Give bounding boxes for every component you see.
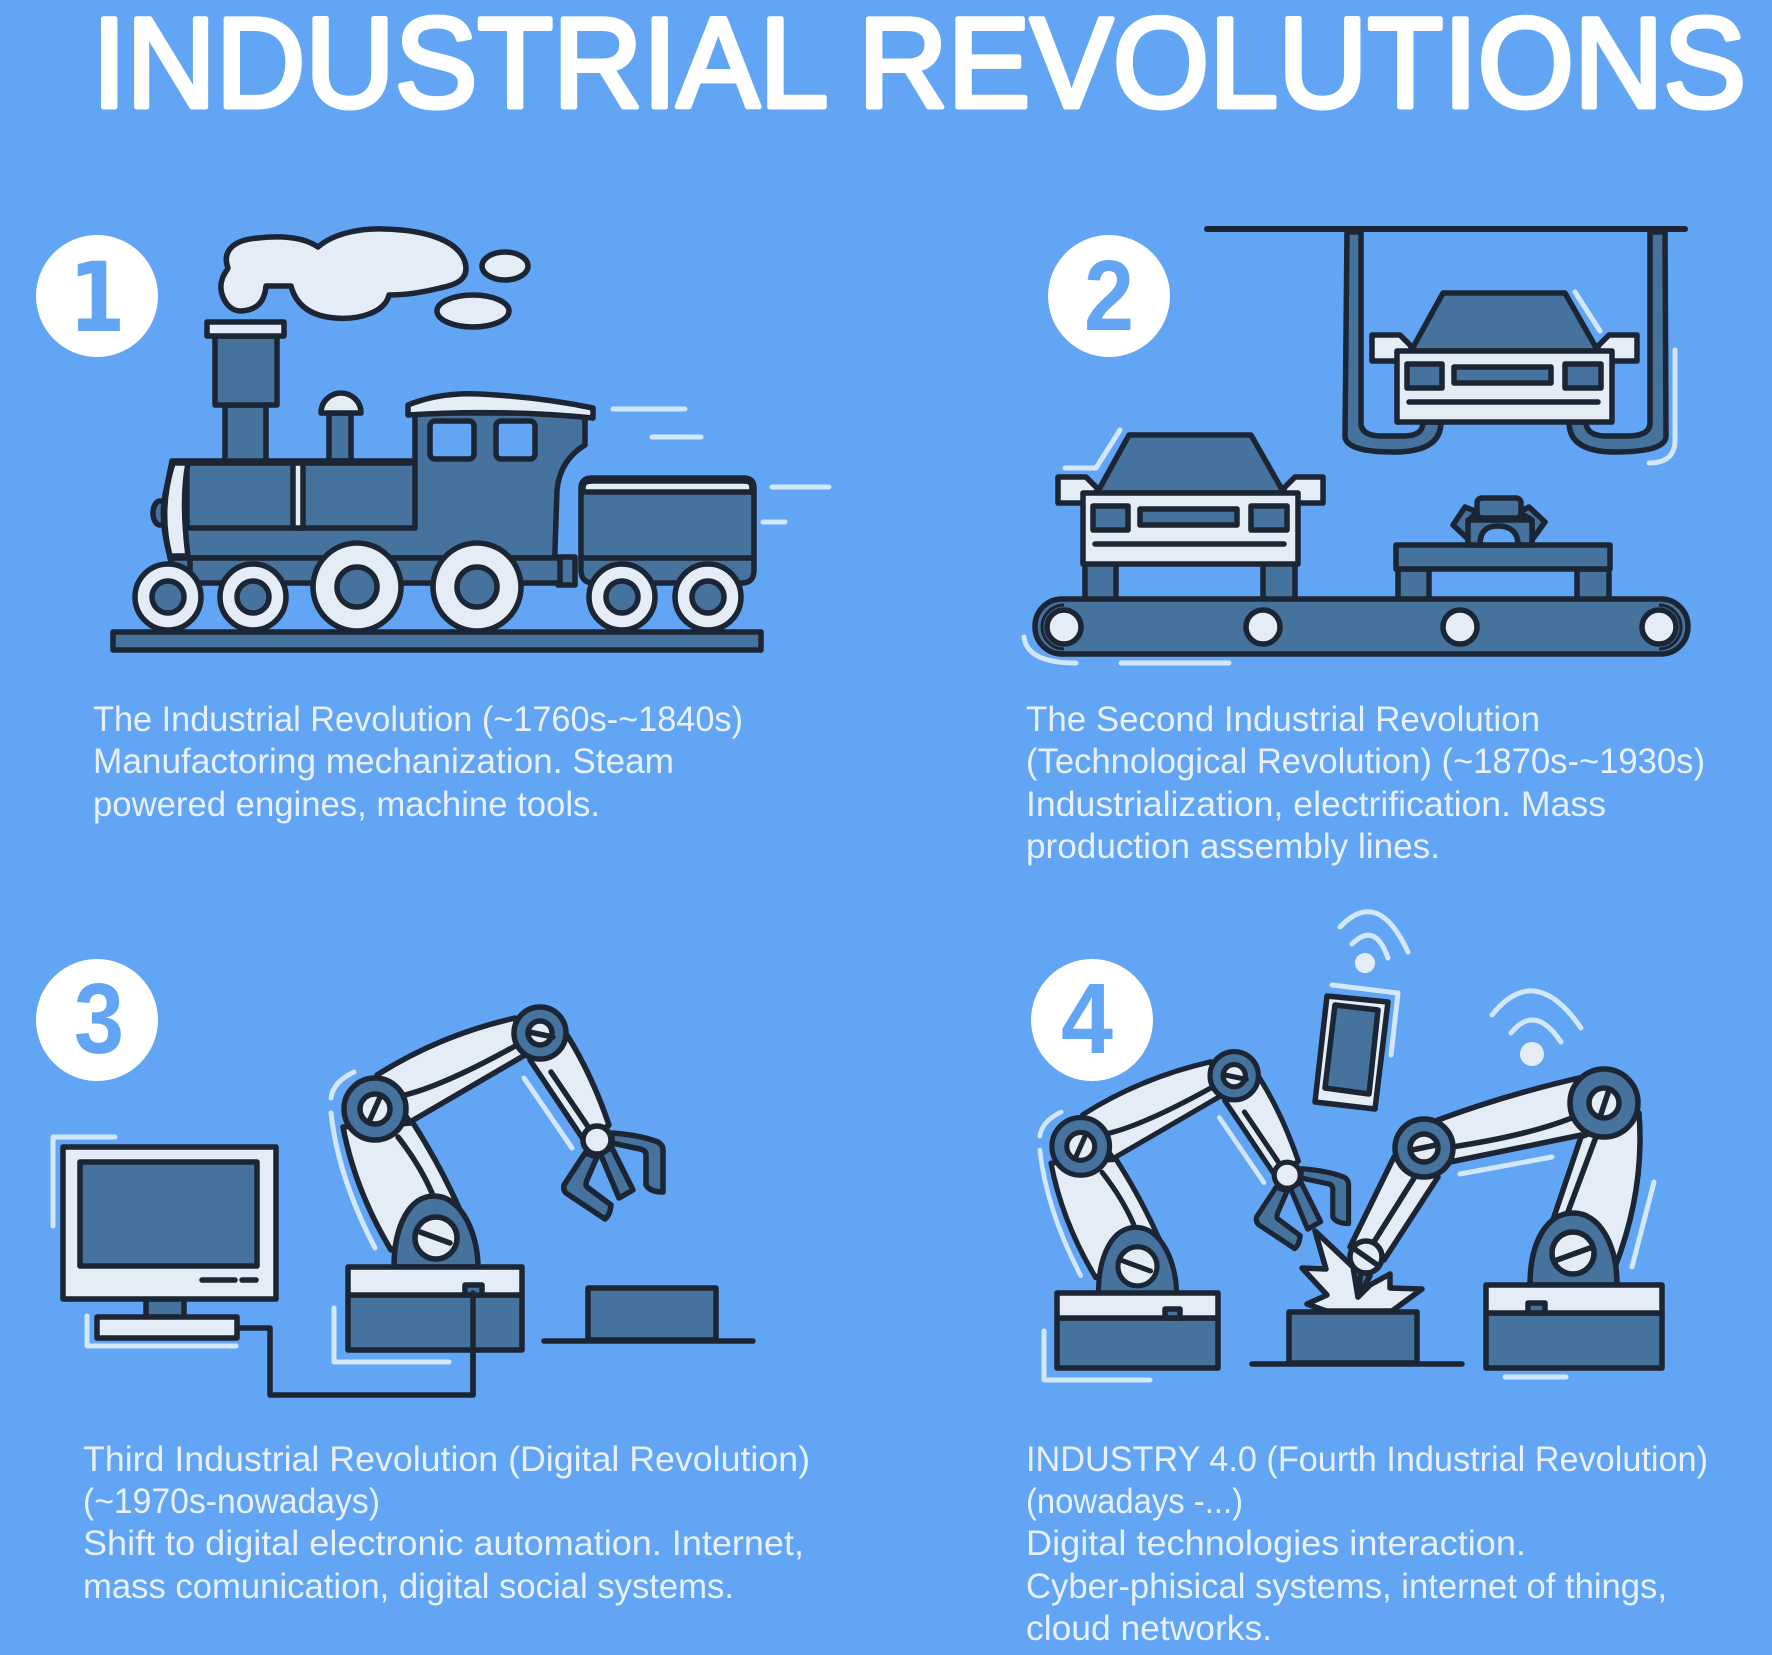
- text: third revolution: [83, 1439, 810, 1606]
- text: second revolution: (Technological Revolution) (~1870s-~1930s): [1026, 741, 1705, 781]
- number badge 2: 2: [1084, 240, 1134, 352]
- icon: robots, tablet and wifi: [1040, 912, 1662, 1380]
- number badge 1: [36, 235, 158, 357]
- text: first revolution: The Industrial Revolution (~1760s-~1840s): [93, 699, 743, 739]
- text: second revolution: The Second Industrial Revolution: [1026, 699, 1540, 739]
- text: third revolution: Shift to digital electronic automation. Internet,: [83, 1523, 804, 1563]
- icon: assembly line with cars: [1024, 229, 1688, 663]
- text: fourth revolution: Digital technologies interaction.: [1026, 1523, 1526, 1563]
- text: first revolution: [93, 699, 743, 824]
- number badge 3: 3: [74, 963, 124, 1075]
- text: fourth revolution: INDUSTRY 4.0 (Fourth Industrial Revolution): [1026, 1439, 1708, 1479]
- text: fourth revolution: (nowadays -...): [1026, 1481, 1243, 1521]
- text: third revolution: Third Industrial Revolution (Digital Revolution): [83, 1439, 810, 1479]
- text: third revolution: mass comunication, digital social systems.: [83, 1566, 734, 1606]
- number badge 2: [1048, 235, 1170, 357]
- number badge 4: 4: [1061, 963, 1113, 1075]
- text: fourth revolution: Cyber-phisical systems, internet of things,: [1026, 1566, 1667, 1606]
- text: fourth revolution: [1026, 1439, 1708, 1648]
- icon: computer and robot arm: [53, 1007, 753, 1395]
- panel: first revolution: [36, 229, 829, 824]
- text: second revolution: production assembly lines.: [1026, 826, 1440, 866]
- number badge 4: [1031, 959, 1153, 1081]
- text: second revolution: Industrialization, electrification. Mass: [1026, 784, 1606, 824]
- icon: steam locomotive: [113, 229, 829, 650]
- text: second revolution: [1026, 699, 1705, 866]
- text: third revolution: (~1970s-nowadays): [83, 1481, 380, 1521]
- text: fourth revolution: cloud networks.: [1026, 1608, 1272, 1648]
- panel: third revolution: [36, 959, 810, 1606]
- number badge 3: [36, 959, 158, 1081]
- number badge 1: 1: [68, 242, 126, 354]
- panel: fourth revolution: [1026, 912, 1708, 1648]
- text: first revolution: powered engines, machine tools.: [93, 784, 600, 824]
- text: first revolution: Manufactoring mechanization. Steam: [93, 741, 674, 781]
- panel: second revolution: [1024, 229, 1705, 866]
